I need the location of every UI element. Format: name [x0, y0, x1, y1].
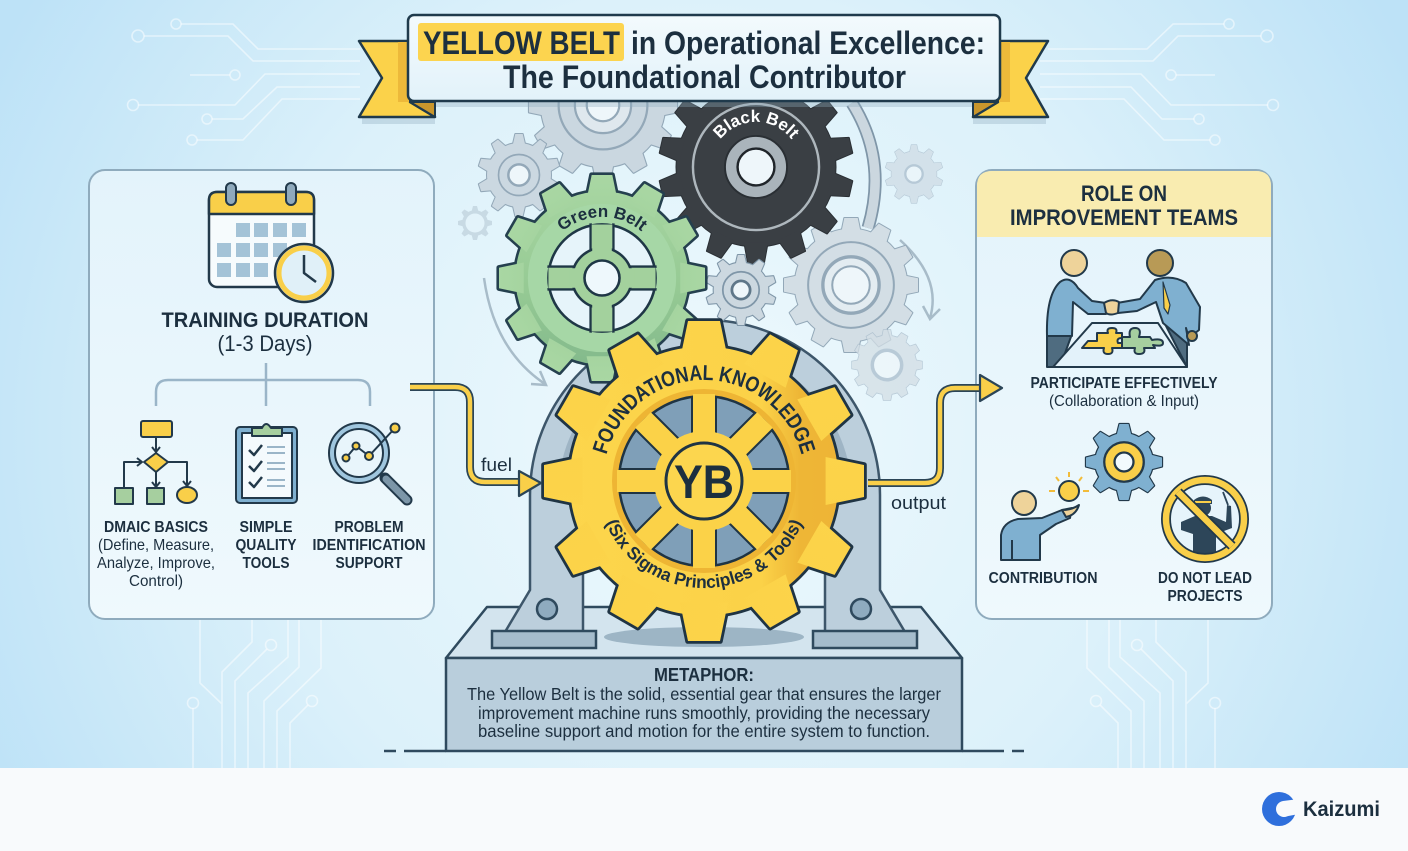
- label: problem identification support: IDENTIFICATION: [312, 537, 426, 554]
- gray gear: left: [478, 134, 560, 216]
- curved guide arcs: [484, 103, 940, 385]
- footer band: [0, 768, 1408, 851]
- label: participate effectively: PARTICIPATE EFFECTIVELY: [1030, 375, 1218, 392]
- ring label: Foundational Knowledge: FOUNDATIONAL KNOWLEDGE: [592, 365, 816, 454]
- header band: [977, 171, 1271, 237]
- black belt gear: [658, 102, 854, 264]
- label: contribution: CONTRIBUTION: [988, 570, 1098, 587]
- title banner: in Operational Excellence:: [631, 25, 985, 61]
- icon: magnifier: [329, 423, 407, 500]
- subheading: (1-3 Days): [218, 331, 312, 356]
- banner shadow: [362, 102, 1046, 124]
- panel: training duration: [89, 170, 434, 619]
- label: do not lead projects: PROJECTS: [1168, 588, 1243, 605]
- label: do not lead projects: DO NOT LEAD: [1158, 570, 1252, 587]
- header text: ROLE ON: [1081, 181, 1167, 206]
- icon: calendar and clock: [209, 183, 333, 302]
- ring label: Six Sigma: (Six Sigma Principles & Tools): [604, 520, 804, 590]
- metaphor text: improvement machine runs smoothly, providing the necessary: [478, 703, 930, 723]
- title banner: [359, 15, 1048, 124]
- header text: IMPROVEMENT TEAMS: [1010, 205, 1238, 230]
- metaphor text: METAPHOR:: [654, 665, 754, 685]
- banner box: [408, 15, 1000, 101]
- logo text: Kaizumi: [1303, 798, 1380, 821]
- label: simple quality tools: QUALITY: [236, 537, 297, 554]
- icon: DMAIC flowchart: [115, 421, 197, 504]
- tree connector: [156, 363, 370, 406]
- foot plates and bolts: [492, 599, 917, 648]
- shadow: [604, 627, 804, 647]
- logo: Kaizumi: [1262, 792, 1380, 826]
- metaphor text: [467, 665, 941, 741]
- label: DMAIC basics: DMAIC BASICS: [104, 519, 208, 536]
- icon: person with idea: [1001, 472, 1089, 560]
- left ribbon: [359, 41, 435, 117]
- label: simple quality tools: [236, 519, 297, 572]
- metaphor text: The Yellow Belt is the solid, essential gear that ensures the larger: [467, 684, 941, 704]
- label: output: output: [891, 493, 946, 513]
- header text: [1010, 181, 1238, 230]
- plinth front: [446, 658, 962, 751]
- label: participate effectively: (Collaboration & Input): [1049, 393, 1199, 410]
- right ribbon: [973, 41, 1048, 117]
- machine arch support: [505, 320, 905, 632]
- small gray gear centre: [706, 255, 776, 325]
- label: DMAIC basics: [97, 519, 215, 590]
- label: simple quality tools: SIMPLE: [240, 519, 293, 536]
- yellow belt main gear: [541, 318, 867, 644]
- arrow: fuel: [410, 387, 541, 496]
- gray gear: faint right: [885, 145, 943, 203]
- base ground line: [384, 750, 1024, 752]
- gray gear: lower right: [852, 330, 922, 400]
- label: problem identification support: [312, 519, 426, 572]
- highlight: [418, 23, 624, 61]
- label: fuel: fuel: [481, 455, 512, 475]
- icon: blue gear: [1086, 424, 1162, 500]
- hub label: YB: YB: [674, 455, 734, 508]
- title line one: YELLOW BELT: [423, 25, 620, 61]
- icon: clipboard: [236, 424, 297, 503]
- panel box: [89, 170, 434, 619]
- icon: handshake over puzzle: [1047, 250, 1200, 367]
- label: DMAIC basics: Control): [129, 573, 183, 590]
- logo mark: [1262, 792, 1299, 826]
- panel box: [976, 170, 1272, 619]
- label: problem identification support: PROBLEM: [334, 519, 404, 536]
- gray gear: faint left: [458, 206, 492, 240]
- label: DMAIC basics: (Define, Measure,: [98, 537, 214, 554]
- green belt gear: [496, 172, 708, 384]
- icon: no leading: [1166, 480, 1244, 558]
- title line two: The Foundational Contributor: [503, 59, 906, 95]
- label: do not lead projects: [1158, 570, 1252, 605]
- panel: role on improvement teams: [976, 170, 1272, 619]
- label: Black Belt: Black Belt: [712, 110, 799, 140]
- label: participate effectively: [1030, 375, 1218, 410]
- label: problem identification support: SUPPORT: [336, 555, 403, 572]
- heading: TRAINING DURATION: [162, 309, 368, 332]
- gear windows: [612, 389, 796, 573]
- plinth top: [446, 607, 962, 658]
- label: Green Belt: Green Belt: [558, 206, 647, 232]
- arrow: output: [868, 375, 1002, 483]
- gray gear: top: [529, 31, 677, 179]
- label: simple quality tools: TOOLS: [242, 555, 290, 572]
- gray gear: right large: [784, 218, 918, 352]
- metaphor text: baseline support and motion for the entire system to function.: [478, 721, 930, 741]
- label: DMAIC basics: Analyze, Improve,: [97, 555, 215, 572]
